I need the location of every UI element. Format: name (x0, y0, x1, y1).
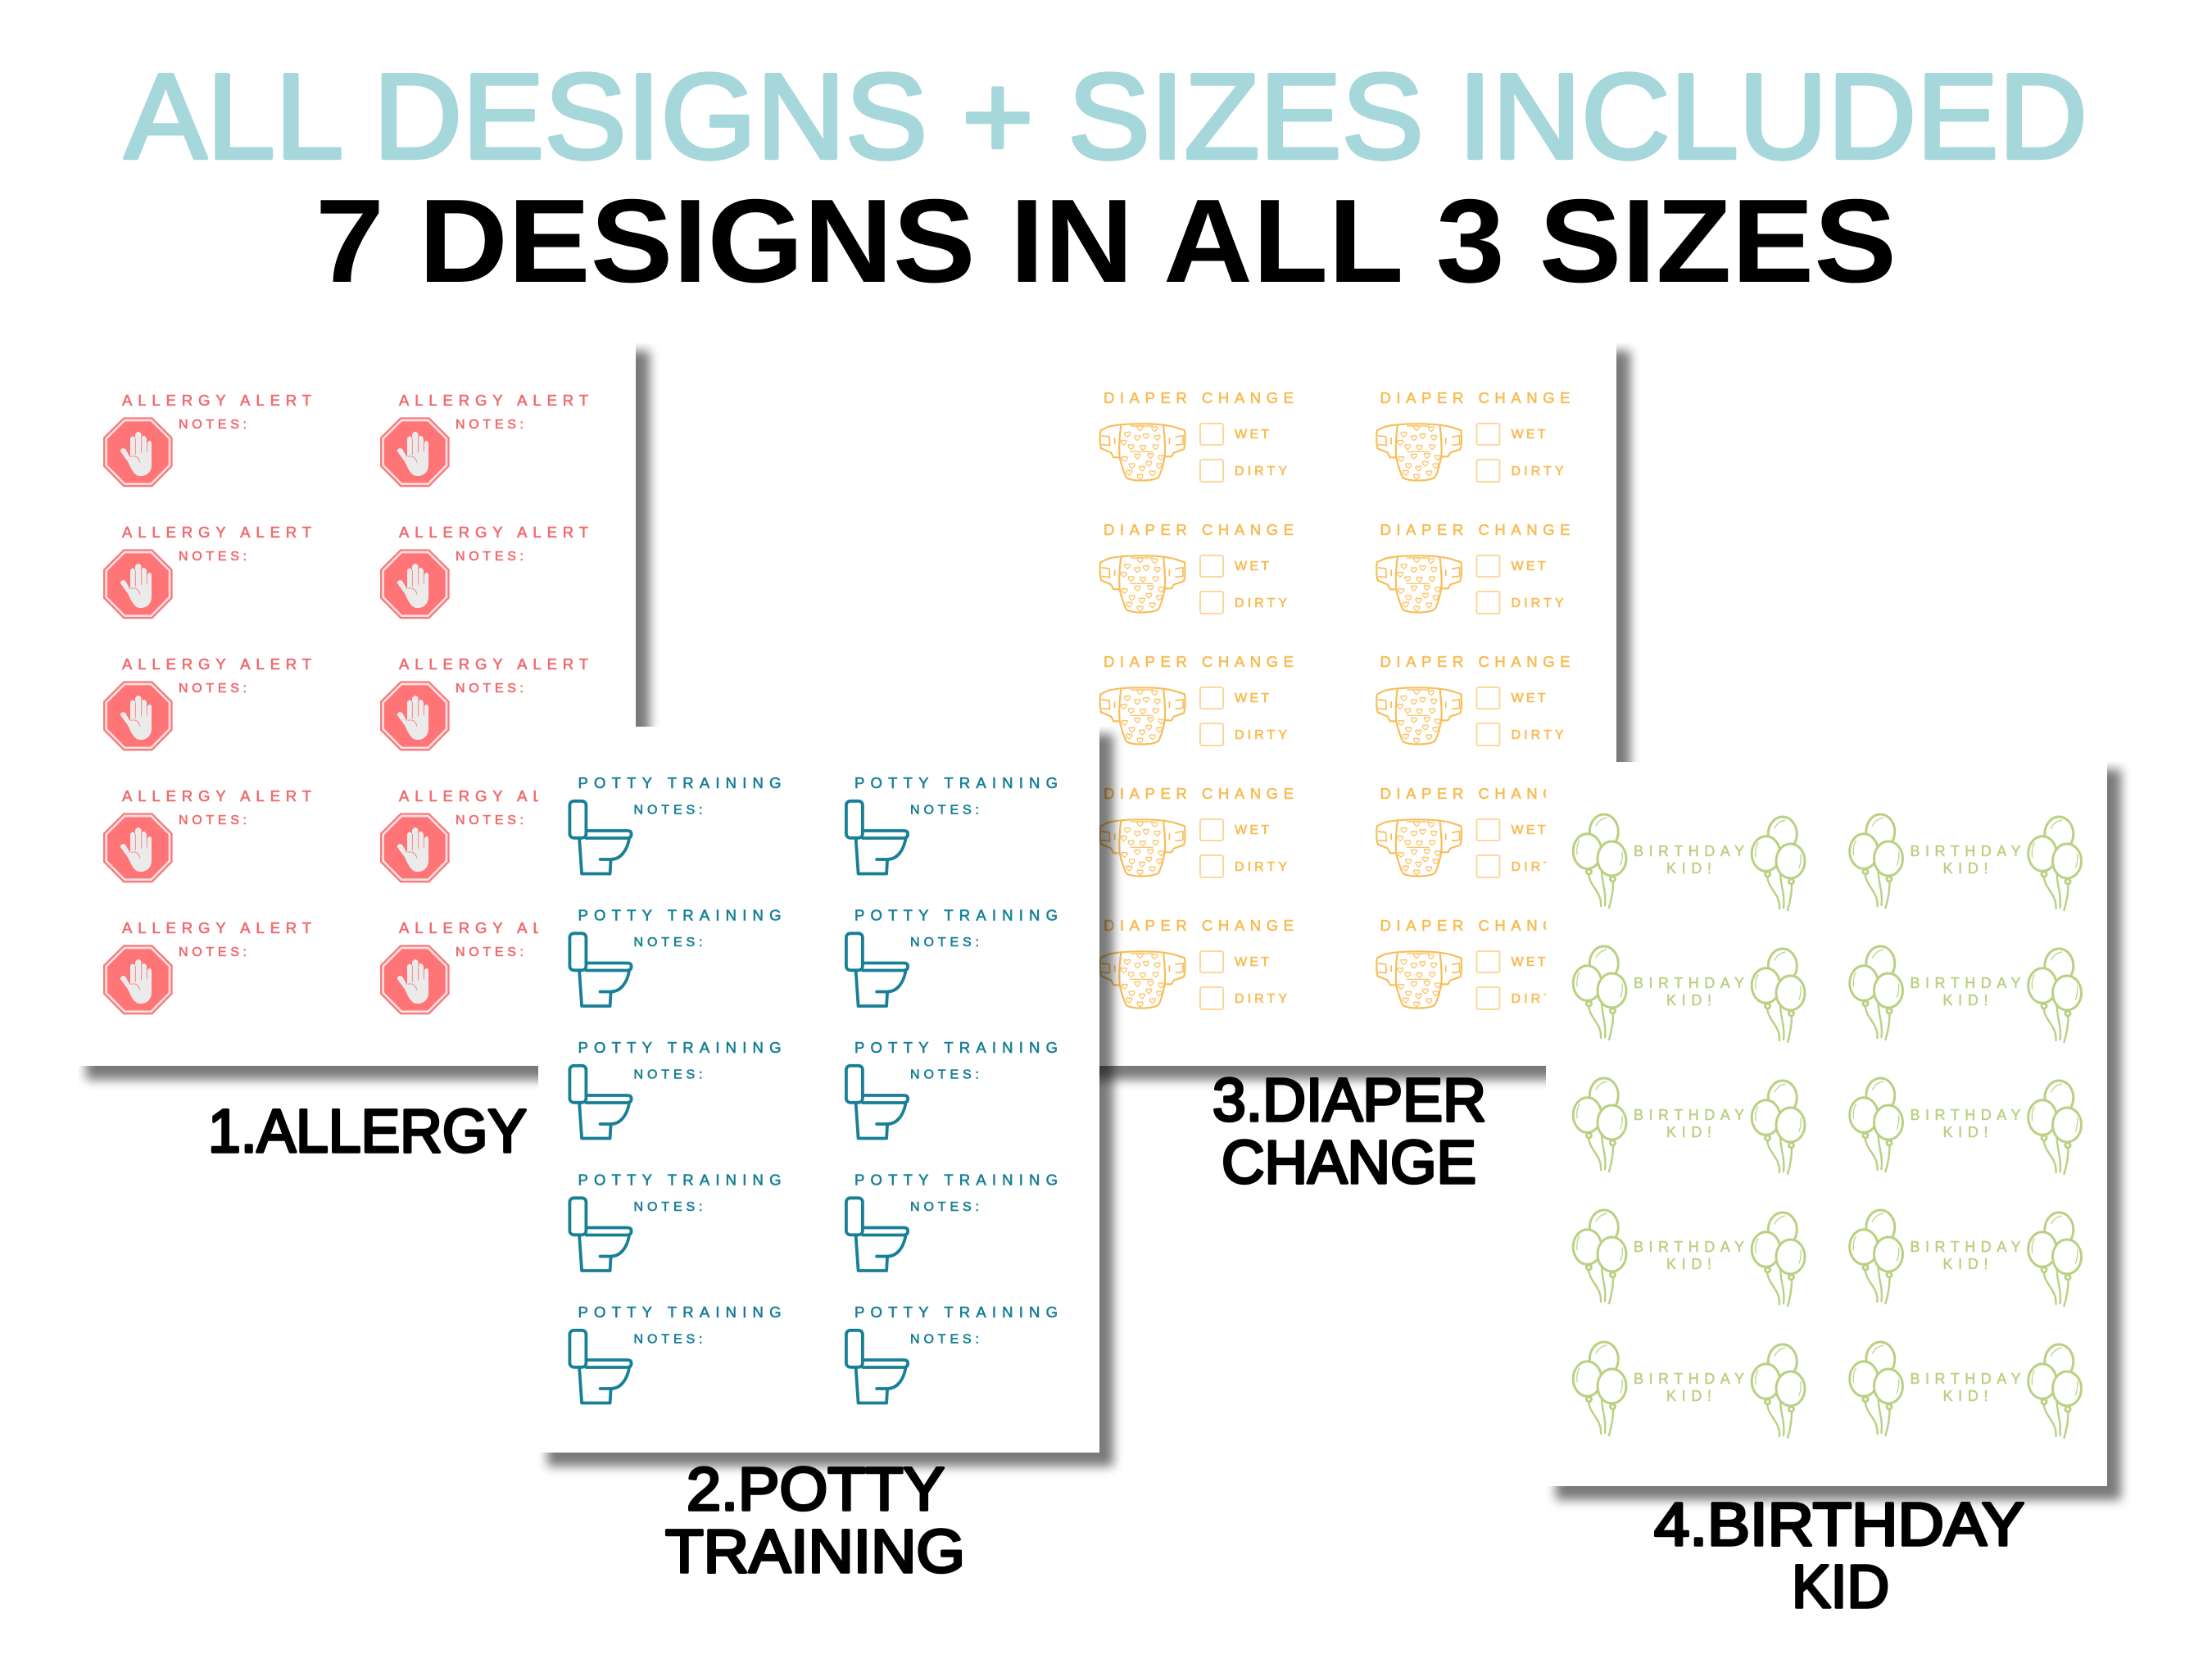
sticker: diaper r2c2: WET (1511, 560, 1546, 573)
panel: birthday kid labels sheet (1546, 762, 2121, 1500)
sticker: diaper r3c2: DIAPER CHANGE (1380, 653, 1570, 670)
caption: 2.potty training (665, 1455, 965, 1585)
sticker: potty r4c2: NOTES: (910, 1200, 979, 1214)
sticker: birthday r4c2: KID! (1943, 1256, 1988, 1272)
sticker: allergy r3c2: NOTES: (456, 682, 524, 696)
sticker: birthday r4c1: KID! (1666, 1256, 1711, 1272)
caption: 4.birthday kid: KID (1792, 1552, 1889, 1620)
sticker: diaper r4c2: DIAPER CHANGE (1380, 785, 1570, 802)
sticker: potty r2c1: NOTES: (634, 936, 703, 950)
sticker: diaper r3c1: WET (1235, 691, 1269, 705)
sticker: birthday r1c1 (1573, 814, 1805, 910)
sticker: allergy r4c1 (103, 787, 311, 882)
sticker: allergy r1c1: ALLERGY ALERT (122, 392, 311, 409)
caption: 3.diaper change: CHANGE (1222, 1128, 1476, 1196)
caption: 3.diaper change: 3.DIAPER (1213, 1066, 1486, 1134)
sticker: birthday r2c2: BIRTHDAY (1911, 975, 2020, 991)
sticker: diaper r3c2: DIRTY (1511, 728, 1564, 742)
sticker: birthday r5c2: BIRTHDAY (1911, 1371, 2020, 1387)
sticker: allergy r4c2 (380, 787, 588, 882)
sticker: diaper r1c2: DIRTY (1511, 465, 1564, 478)
sticker: birthday r3c2: BIRTHDAY (1911, 1107, 2020, 1123)
sticker: allergy r4c1: ALLERGY ALERT (122, 787, 311, 805)
sticker: allergy r2c2: ALLERGY ALERT (399, 524, 588, 541)
sticker: diaper r2c2 (1376, 521, 1570, 614)
sticker: potty r4c1 (569, 1172, 782, 1271)
sticker: birthday r3c2: KID! (1943, 1124, 1988, 1140)
sticker: allergy r2c1 (103, 524, 311, 619)
sticker: allergy r2c1: ALLERGY ALERT (122, 524, 311, 541)
sticker: diaper r4c1: DIRTY (1235, 860, 1287, 874)
sticker: birthday r1c2: BIRTHDAY (1911, 843, 2020, 859)
sticker: birthday r1c2 (1850, 814, 2081, 910)
sticker: potty r1c2: NOTES: (910, 803, 979, 818)
sticker: diaper r1c1 (1100, 389, 1294, 482)
sticker: allergy r4c2: NOTES: (456, 814, 524, 827)
sticker: diaper r5c1: WET (1235, 955, 1269, 969)
sticker: allergy r1c2: ALLERGY ALERT (399, 392, 588, 409)
caption: 2.potty training: TRAINING (665, 1517, 965, 1585)
sticker: allergy r4c1: NOTES: (179, 814, 247, 827)
sticker: diaper r4c1: DIAPER CHANGE (1104, 785, 1294, 802)
sticker: allergy r5c2: ALLERGY ALERT (399, 919, 588, 936)
sticker: diaper r3c2 (1376, 653, 1570, 746)
sticker: allergy r4c2: ALLERGY ALERT (399, 787, 588, 805)
sticker: potty r5c1 (569, 1303, 782, 1403)
sticker: birthday r5c1: KID! (1666, 1388, 1711, 1404)
sticker: potty r3c1 (569, 1039, 782, 1139)
sticker: diaper r1c1: DIRTY (1235, 465, 1287, 478)
sticker: diaper r3c1: DIRTY (1235, 728, 1287, 742)
sticker: birthday r1c2: KID! (1943, 860, 1988, 877)
sticker: birthday r5c2 (1850, 1342, 2081, 1438)
sticker: potty r3c1: POTTY TRAINING (578, 1039, 782, 1056)
caption: 4.birthday kid: 4.BIRTHDAY (1654, 1490, 2024, 1558)
sticker: birthday r2c1: BIRTHDAY (1634, 975, 1744, 991)
sticker: diaper r4c1: WET (1235, 823, 1269, 837)
sticker: allergy r5c1 (103, 919, 311, 1014)
sticker: allergy r5c2 (380, 919, 588, 1014)
sticker: potty r5c2 (846, 1303, 1058, 1403)
sticker: diaper r1c2 (1376, 389, 1570, 482)
sticker: diaper r3c1: DIAPER CHANGE (1104, 653, 1294, 670)
sticker: diaper r1c2: WET (1511, 428, 1546, 442)
caption: 1.allergy: 1.ALLERGY (208, 1097, 527, 1165)
sticker: potty r1c1 (569, 774, 782, 873)
sticker: allergy r3c1 (103, 655, 311, 750)
sticker: birthday r3c1 (1573, 1078, 1805, 1174)
sticker: potty r4c1: NOTES: (634, 1200, 703, 1214)
sticker: diaper r4c2: DIRTY (1511, 860, 1564, 874)
sticker: allergy r3c1: ALLERGY ALERT (122, 655, 311, 673)
sticker: birthday r2c2: KID! (1943, 992, 1988, 1009)
sticker: potty r1c1: POTTY TRAINING (578, 774, 782, 791)
sticker: birthday r4c2 (1850, 1210, 2081, 1306)
sticker: allergy r3c1: NOTES: (179, 682, 247, 696)
sticker: birthday r2c1: KID! (1666, 992, 1711, 1009)
sticker: diaper r5c1: DIRTY (1235, 992, 1287, 1006)
sticker: birthday r5c2: KID! (1943, 1388, 1988, 1404)
sticker: allergy r3c2: ALLERGY ALERT (399, 655, 588, 673)
sticker: potty r1c1: NOTES: (634, 803, 703, 818)
sticker: diaper r1c1: DIAPER CHANGE (1104, 389, 1294, 406)
sticker: birthday r3c1: BIRTHDAY (1634, 1107, 1744, 1123)
sticker: diaper r4c2: WET (1511, 823, 1546, 837)
sticker: birthday r4c1 (1573, 1210, 1805, 1306)
sticker: potty r3c2 (846, 1039, 1058, 1139)
sticker: diaper r2c2: DIRTY (1511, 596, 1564, 610)
panel: allergy labels sheet (79, 343, 650, 1080)
sticker: birthday r5c1: BIRTHDAY (1634, 1371, 1744, 1387)
sticker: allergy r2c2: NOTES: (456, 550, 524, 564)
sticker: diaper r1c2: DIAPER CHANGE (1380, 389, 1570, 406)
sticker: diaper r5c1: DIAPER CHANGE (1104, 917, 1294, 934)
sticker: allergy r5c1: ALLERGY ALERT (122, 919, 311, 936)
sticker: potty r2c1 (569, 906, 782, 1006)
sticker: birthday r3c1: KID! (1666, 1124, 1711, 1140)
sticker: potty r5c1: NOTES: (634, 1332, 703, 1347)
sticker: potty r4c2 (846, 1172, 1058, 1271)
sticker: potty r1c2 (846, 774, 1058, 873)
sticker: diaper r5c2: DIAPER CHANGE (1380, 917, 1570, 934)
sticker: birthday r2c1 (1573, 946, 1805, 1042)
sticker: allergy r3c2 (380, 655, 588, 750)
sticker: diaper r1c1: WET (1235, 428, 1269, 442)
sticker: birthday r1c1: KID! (1666, 860, 1711, 877)
sticker: allergy r1c2 (380, 392, 588, 487)
caption: 3.diaper change (1213, 1066, 1486, 1196)
sticker: birthday r3c2 (1850, 1078, 2081, 1174)
sticker: allergy r5c1: NOTES: (179, 945, 247, 959)
sticker: birthday r4c1: BIRTHDAY (1634, 1239, 1744, 1255)
panel: diaper change labels sheet (1059, 343, 1630, 1080)
sticker: diaper r5c1 (1100, 917, 1294, 1009)
sticker: birthday r5c1 (1573, 1342, 1805, 1438)
sticker: allergy r1c2: NOTES: (456, 418, 524, 432)
title: all designs + sizes included: ALL DESIGNS + SIZES INCLUDED (125, 49, 2087, 184)
sticker: potty r4c1: POTTY TRAINING (578, 1172, 782, 1188)
caption: 4.birthday kid (1654, 1490, 2024, 1620)
sticker: birthday r1c1: BIRTHDAY (1634, 843, 1744, 859)
sticker: diaper r2c1: DIAPER CHANGE (1104, 521, 1294, 538)
sticker: diaper r2c2: DIAPER CHANGE (1380, 521, 1570, 538)
sticker: potty r3c2: NOTES: (910, 1068, 979, 1081)
caption: 2.potty training: 2.POTTY (687, 1455, 945, 1523)
sticker: potty r2c2: POTTY TRAINING (854, 906, 1058, 924)
sticker: allergy r2c1: NOTES: (179, 550, 247, 564)
sticker: diaper r3c1 (1100, 653, 1294, 746)
sticker: diaper r2c1: DIRTY (1235, 596, 1287, 610)
sticker: birthday r4c2: BIRTHDAY (1911, 1239, 2020, 1255)
sticker: diaper r5c2: WET (1511, 955, 1546, 969)
sticker: potty r2c2 (846, 906, 1058, 1006)
subtitle: 7 designs in all 3 sizes: 7 DESIGNS IN ALL 3 SIZES (315, 175, 1897, 307)
sticker: potty r5c2: POTTY TRAINING (854, 1303, 1058, 1321)
panel: potty training labels sheet (538, 727, 1113, 1466)
sticker: allergy r5c2: NOTES: (456, 945, 524, 959)
sticker: diaper r4c2 (1376, 785, 1570, 877)
sticker: diaper r2c1 (1100, 521, 1294, 614)
sticker: potty r2c1: POTTY TRAINING (578, 906, 782, 924)
sticker: allergy r1c1 (103, 392, 311, 487)
sticker: birthday r2c2 (1850, 946, 2081, 1042)
sticker: potty r1c2: POTTY TRAINING (854, 774, 1058, 791)
sticker: diaper r2c1: WET (1235, 560, 1269, 573)
sticker: diaper r4c1 (1100, 785, 1294, 877)
sticker: potty r3c1: NOTES: (634, 1068, 703, 1081)
sticker: allergy r2c2 (380, 524, 588, 619)
sticker: diaper r5c2 (1376, 917, 1570, 1009)
sticker: potty r5c1: POTTY TRAINING (578, 1303, 782, 1321)
sticker: potty r2c2: NOTES: (910, 936, 979, 950)
sticker: diaper r5c2: DIRTY (1511, 992, 1564, 1006)
sticker: potty r4c2: POTTY TRAINING (854, 1172, 1058, 1188)
sticker: allergy r1c1: NOTES: (179, 418, 247, 432)
sticker: diaper r3c2: WET (1511, 691, 1546, 705)
sticker: potty r5c2: NOTES: (910, 1332, 979, 1347)
sticker: potty r3c2: POTTY TRAINING (854, 1039, 1058, 1056)
